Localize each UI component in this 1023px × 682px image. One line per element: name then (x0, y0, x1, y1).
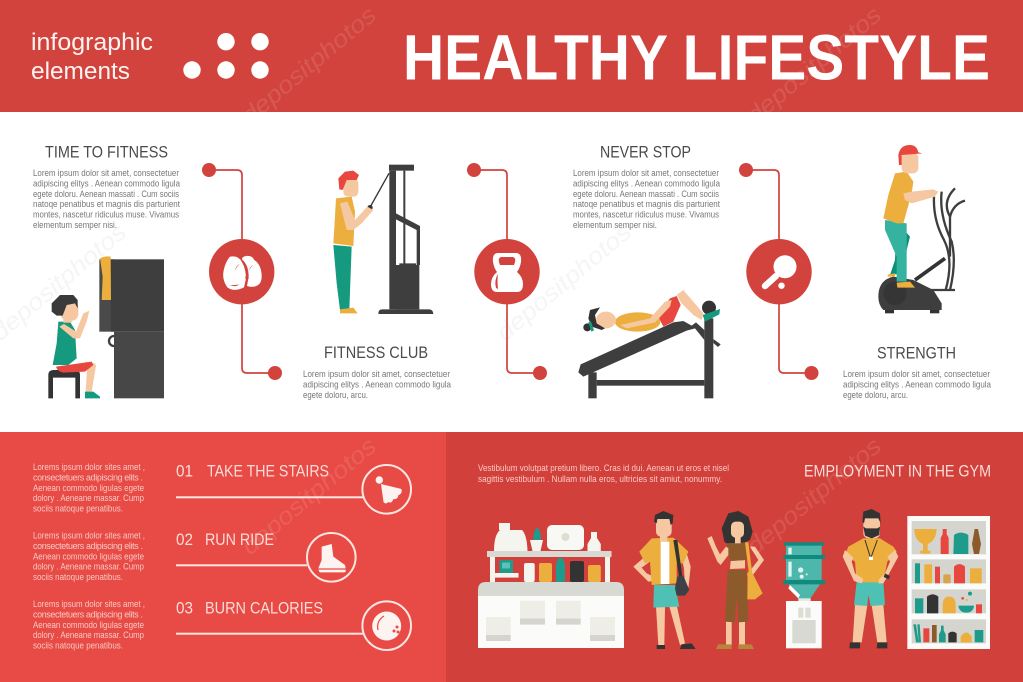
heading: time to fitness: TIME TO FITNESS (45, 144, 168, 162)
item 03: burn calories: 03 (176, 598, 193, 618)
text block: time to fitness: elementum semper nisi. (33, 220, 117, 230)
watermarks (0, 2, 887, 561)
text block: tip 3: consectetuers adipiscing elits . (33, 609, 143, 619)
text block: tip 1: Lorems ipsum dolor sites amet , (33, 462, 145, 472)
text block: never stop (573, 168, 720, 230)
text block: tip 1: sociis natoque penatibus. (33, 504, 123, 514)
text block: tip 2: Lorems ipsum dolor sites amet , (33, 530, 145, 540)
text block: fitness club: adipiscing elitys . Aenean commodo ligula (303, 379, 451, 389)
panel: never stop (573, 144, 721, 398)
icon: ice skate (318, 544, 346, 572)
item 02: run ride: 02 (176, 530, 193, 549)
illustration: man on elliptical (878, 145, 965, 313)
text block: tip 3 (33, 599, 145, 651)
text block: tip 2: dolory . Aeneane massar. Cump (33, 562, 144, 572)
illustration: person on incline bench (578, 290, 721, 398)
text block: tip 3: Lorems ipsum dolor sites amet , (33, 599, 145, 609)
icon: kettlebell (491, 253, 523, 292)
item 01: take the stairs: 01 (176, 462, 193, 481)
text block: strength: egete doloru, arcu. (843, 390, 908, 400)
item 03: burn calories (176, 598, 411, 650)
text block: employment (478, 463, 729, 484)
text block: time to fitness: adipiscing elitys . Aenean commodo ligula (33, 178, 180, 188)
text block: tip 2: consectetuers adipiscing elits . (33, 541, 143, 551)
watermarks: depositphotos (742, 433, 887, 561)
panel: time to fitness (33, 144, 180, 398)
text block: tip 1: consectetuers adipiscing elits . (33, 472, 143, 482)
text block: never stop: elementum semper nisi. (573, 220, 657, 230)
icon: five dots (183, 33, 269, 79)
text block: tip 2: Aenean commodo ligulas egete (33, 551, 144, 561)
text block: fitness club: egete doloru, arcu. (303, 390, 368, 400)
text block: tip 1: dolory . Aeneane massar. Cump (33, 493, 144, 503)
header banner (0, 0, 1023, 112)
text block: never stop: Lorem ipsum dolor sit amet, consectetuer (573, 168, 719, 178)
item 02: run ride: RUN RIDE (205, 530, 274, 549)
illustration: reception counter (478, 523, 624, 648)
watermarks: depositphotos (237, 2, 382, 130)
text block: tip 1 (33, 462, 145, 514)
text block: tip 3: dolory . Aeneane massar. Cump (33, 630, 144, 640)
panel: fitness club (303, 165, 451, 400)
item 01: take the stairs (176, 462, 411, 514)
heading: strength: STRENGTH (877, 344, 956, 362)
text block: tip 1: Aenean commodo ligulas egete (33, 483, 144, 493)
icon: table tennis paddle (765, 255, 796, 289)
text block: time to fitness (33, 168, 180, 230)
icon: shuttlecock (376, 476, 402, 504)
illustration: woman with bag (707, 511, 764, 649)
item 01: take the stairs: TAKE THE STAIRS (207, 462, 329, 481)
illustration: child at machine (48, 256, 164, 398)
text block: time to fitness: egete doloru. Aenean massati . Cum sociis (33, 189, 179, 199)
illustration: man at cable machine (333, 165, 433, 314)
heading: employment in the gym: EMPLOYMENT IN THE GYM (804, 462, 991, 481)
item 03: burn calories: BURN CALORIES (205, 598, 323, 618)
text block: time to fitness: montes, nascetur ridiculus muse. Vivamus (33, 210, 179, 220)
heading: never stop: NEVER STOP (600, 144, 691, 162)
text block: tip 3: sociis natoque penatibus. (33, 641, 123, 651)
text block: employment: Vestibulum volutpat pretium libero. Cras id dui. Aenean ut eros et nisel (478, 463, 729, 473)
text block: never stop: egete doloru. Aenean massati . Cum sociis (573, 189, 719, 199)
panel: strength (843, 145, 991, 400)
connector 2 with kettlebell icon (467, 163, 547, 380)
text block: time to fitness: natoqe penatibus et magnis dis parturient (33, 199, 180, 209)
text block: strength: adipiscing elitys . Aenean commodo ligula (843, 379, 991, 389)
text block: tip 2: sociis natoque penatibus. (33, 572, 123, 582)
text block: fitness club (303, 369, 451, 400)
watermarks: depositphotos (742, 2, 887, 130)
panel: employment in the gym (446, 432, 1023, 682)
icon: boxing gloves (223, 256, 262, 290)
illustration: man with bag (633, 511, 696, 649)
text block: fitness club: Lorem ipsum dolor sit amet, consectetuer (303, 369, 450, 379)
connector 3 with paddle icon (739, 163, 818, 380)
illustration: water cooler (783, 542, 825, 648)
subtitle: infographic elements (31, 29, 153, 85)
connector 1 with gloves icon (202, 163, 282, 380)
text block: never stop: natoqe penatibus et magnis dis parturient (573, 199, 720, 209)
text block: tip 2 (33, 530, 145, 582)
text block: strength: Lorem ipsum dolor sit amet, consectetuer (843, 369, 990, 379)
illustration: coach (843, 509, 898, 648)
text block: tip 3: Aenean commodo ligulas egete (33, 620, 144, 630)
text block: never stop: adipiscing elitys . Aenean commodo ligula (573, 178, 720, 188)
illustration: shelf with products (907, 516, 990, 649)
panel: tips (0, 432, 446, 682)
watermarks: depositphotos (237, 433, 382, 561)
item 02: run ride (176, 530, 356, 582)
text block: never stop: montes, nascetur ridiculus muse. Vivamus (573, 210, 719, 220)
icon: bowling ball (372, 612, 401, 640)
text block: time to fitness: Lorem ipsum dolor sit amet, consectetuer (33, 168, 179, 178)
text block: employment: sagittis vestibulum . Nullam nulla eros, ultricies sit amiut, nonummy. (478, 474, 722, 484)
text block: strength (843, 369, 991, 400)
heading: fitness club: FITNESS CLUB (324, 344, 428, 362)
subtitle: infographic elements: infographic (31, 29, 153, 56)
watermarks: depositphotos (492, 219, 637, 347)
subtitle: infographic elements: elements (31, 58, 130, 85)
